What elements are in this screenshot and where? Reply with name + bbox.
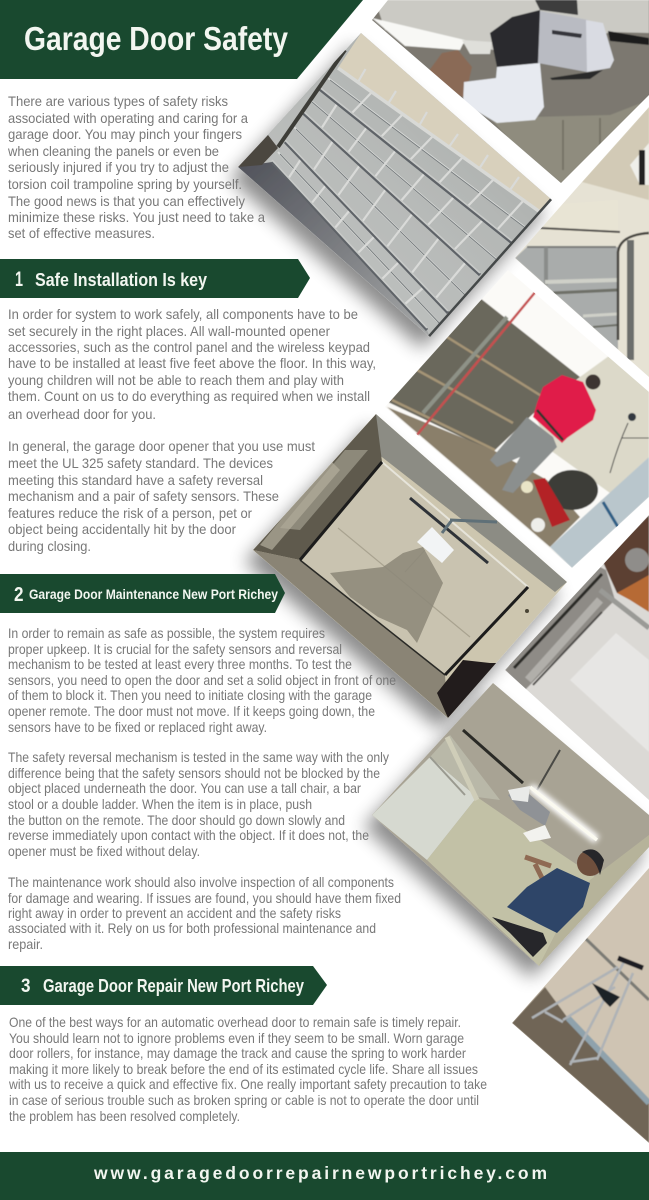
section 2 text, second paragraph: the button on the remote. The door should go down slowly and bbox=[8, 813, 345, 828]
intro text block bbox=[7, 94, 265, 241]
section 2 text, third paragraph: for damage and wearing. If issues are found, you should have them fixed bbox=[8, 891, 401, 906]
intro text block: garage door. You may pinch your fingers bbox=[8, 127, 242, 142]
section 3 text: the problem has been resolved completely. bbox=[9, 1109, 240, 1124]
website address: www.garagedoorrepairnewportrichey.com bbox=[93, 1163, 547, 1183]
beige ceiling band bbox=[338, 33, 552, 212]
section 2 text, first paragraph: proper upkeep. It is crucial for the safety sensors and reversal bbox=[8, 642, 342, 657]
footer bar bbox=[0, 1152, 649, 1200]
photo: white door and dark track bbox=[500, 510, 649, 805]
section 3 text: You should learn not to ignore problems even if they seem to be small. Worn garage bbox=[9, 1031, 464, 1046]
section 2 text, second paragraph: stool or a double ladder. When the item is in place, push bbox=[8, 797, 312, 812]
section 1 text, first paragraph: an overhead door for you. bbox=[8, 407, 156, 422]
section 1 text, second paragraph: during closing. bbox=[8, 539, 91, 554]
blue-grey wall wedge bbox=[238, 162, 430, 337]
photo: door with shadow and skylight bbox=[250, 410, 570, 720]
section 2 text, first paragraph: sensors have to be fixed or replaced right away. bbox=[8, 720, 267, 735]
section 1 text, second paragraph bbox=[8, 439, 315, 554]
section 2 banner bbox=[0, 574, 285, 613]
intro text block: There are various types of safety risks bbox=[8, 94, 228, 109]
section 2 text, second paragraph: difference being that the safety sensors should not be blocked by the bbox=[8, 766, 380, 781]
section 1 text, second paragraph: meeting this standard have a safety reversal bbox=[8, 473, 263, 488]
section 2 text, second paragraph: The safety reversal mechanism is tested in the same way with the only bbox=[8, 750, 389, 765]
intro text block: torsion coil trampoline spring by yourself. bbox=[8, 177, 242, 192]
section 3 number: 3 bbox=[21, 976, 30, 997]
section 2 number: 2 bbox=[14, 584, 24, 606]
intro text block: set of effective measures. bbox=[8, 226, 155, 241]
section 1 text, second paragraph: features reduce the risk of a person, pet or bbox=[8, 506, 252, 521]
section 2 text, second paragraph: object placed underneath the door. You can use a tall chair, a bar bbox=[8, 781, 361, 796]
section 2 text, second paragraph: opener must be fixed without delay. bbox=[8, 844, 200, 859]
section 2 text, third paragraph: right away in order to prevent an accident and the safety risks bbox=[8, 906, 341, 921]
photo: step ladder in garage bbox=[510, 865, 649, 1145]
section 2 text, first paragraph: In order to remain as safe as possible, the system requires bbox=[8, 626, 325, 641]
photo: garage door frame with panels bbox=[235, 30, 560, 340]
intro text block: The good news is that you can effectively bbox=[8, 194, 245, 209]
section 2 text, third paragraph: The maintenance work should also involve inspection of all components bbox=[8, 875, 394, 890]
title banner bbox=[0, 0, 363, 79]
intro text block: minimize these risks. You just need to take a bbox=[8, 210, 265, 225]
section 2 text, second paragraph bbox=[8, 750, 389, 859]
photo: garage door opener unit bbox=[370, 0, 649, 190]
section 2 text, first paragraph: mechanism to be tested at least every three months. To test the bbox=[8, 657, 352, 672]
photo: door and track from below bbox=[510, 105, 649, 380]
section 2 text, first paragraph bbox=[8, 626, 396, 735]
section 1 text, second paragraph: object being accidentally hit by the door bbox=[8, 522, 236, 537]
section 2 text, third paragraph: associated with it. Rely on us for both professional maintenance and bbox=[8, 921, 376, 936]
section 1 text, second paragraph: In general, the garage door opener that you use must bbox=[8, 439, 315, 454]
photo: technician in blue shirt with opener bbox=[370, 680, 649, 970]
section 1 text, second paragraph: meet the UL 325 safety standard. The devices bbox=[8, 456, 273, 471]
section 1 heading: Safe Installation Is key bbox=[35, 269, 208, 290]
section 1 text, second paragraph: mechanism and a pair of safety sensors. These bbox=[8, 489, 279, 504]
section 2 text, second paragraph: reverse immediately upon contact with the object. If it does not, the bbox=[8, 828, 369, 843]
section 2 heading: Garage Door Maintenance New Port Richey bbox=[29, 587, 278, 602]
section 3 text: in case of serious trouble such as broken spring or cable is not to operate the door until bbox=[9, 1093, 479, 1108]
section 2 text, third paragraph: repair. bbox=[8, 937, 43, 952]
section 1 text, first paragraph: have to be installed at least five feet above the floor. In this way, bbox=[8, 356, 376, 371]
title: Garage Door Safety bbox=[24, 20, 289, 57]
section 3 text: with us to receive a quick and effective fix. One really important safety precaution to take bbox=[8, 1077, 487, 1092]
section 2 text, first paragraph: sensors, you need to open the door and set a solid object in front of one bbox=[8, 673, 396, 688]
section 1 text, first paragraph: them. Count on us to do everything as required when we install bbox=[8, 389, 370, 404]
section 2 text, third paragraph bbox=[8, 875, 401, 952]
section 2 text, first paragraph: opener remote. The door must not move. If it keeps going down, the bbox=[8, 704, 375, 719]
section 1 text, first paragraph: set securely in the right places. All wall-mounted opener bbox=[8, 324, 330, 339]
intro text block: when cleaning the panels or even be bbox=[7, 144, 219, 159]
intro text block: associated with operating and caring for a bbox=[8, 111, 248, 126]
section 1 text, first paragraph: young children will not be able to reach them and play with bbox=[8, 373, 344, 388]
intro text block: seriously injured if you try to adjust the bbox=[8, 160, 229, 175]
section 1 number: 1 bbox=[15, 268, 23, 291]
section 1 text, first paragraph bbox=[8, 307, 376, 422]
section 3 text: door rollers, for instance, may damage the track and cause the spring to work harder bbox=[9, 1046, 466, 1061]
section 3 heading: Garage Door Repair New Port Richey bbox=[43, 976, 304, 996]
section 1 text, first paragraph: accessories, such as the control panel and the wireless keypad bbox=[8, 340, 370, 355]
section 2 text, first paragraph: of them to block it. Then you need to initiate closing with the garage bbox=[8, 688, 372, 703]
section 3 text bbox=[8, 1015, 487, 1124]
section 1 text, first paragraph: In order for system to work safely, all components have to be bbox=[8, 307, 358, 322]
section 3 text: making it more likely to break before the end of its estimated cycle life. Share all issues bbox=[9, 1062, 478, 1077]
section 3 banner bbox=[0, 966, 327, 1005]
photo: technician in red shirt installing a door bbox=[386, 292, 649, 568]
section 3 text: One of the best ways for an automatic overhead door to remain safe is timely repair. bbox=[9, 1015, 461, 1030]
section 1 banner bbox=[0, 259, 310, 298]
